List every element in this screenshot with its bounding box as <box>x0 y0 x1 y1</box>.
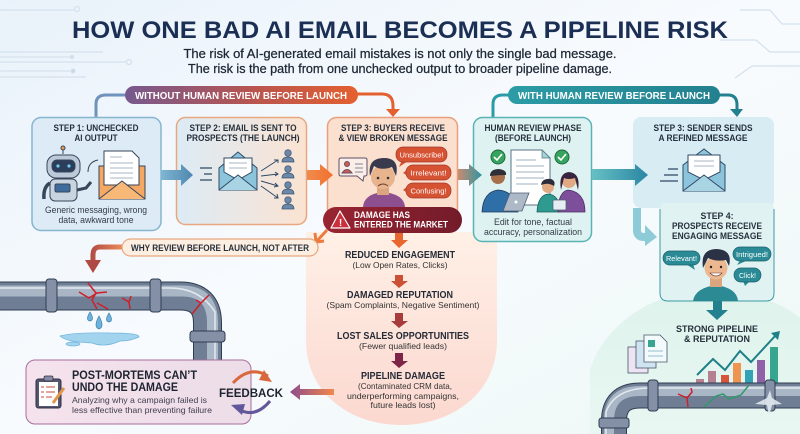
sender heading <box>654 123 752 143</box>
panel: post-mortems <box>26 360 251 424</box>
lost sales opportunities: (Fewer qualified leads) <box>359 341 447 351</box>
human review heading <box>484 123 582 143</box>
pipe flanges <box>46 279 225 342</box>
connector: step 1 to without banner <box>96 95 130 118</box>
post-mortems description: Analyzing why a campaign failed is <box>72 395 207 405</box>
banner: without human review <box>125 86 358 104</box>
banner: without human review: WITHOUT HUMAN REVIEW BEFORE LAUNCH <box>135 90 347 102</box>
icon: profile card bubble <box>339 158 367 181</box>
speech bubble: irrelevant: Irrelevant! <box>410 168 446 178</box>
human review description: accuracy, personalization <box>484 227 582 237</box>
icon: worried buyer <box>363 158 405 207</box>
speech bubble: relevant: Relevant! <box>666 254 697 263</box>
feedback loop: FEEDBACK <box>219 386 283 400</box>
reduced engagement: (Low Open Rates, Clicks) <box>352 260 448 270</box>
why review pill <box>122 239 318 256</box>
step 4 heading: STEP 4: <box>700 211 734 221</box>
step 1 heading: AI OUTPUT <box>74 133 118 143</box>
pipeline damage: future leads lost) <box>370 400 436 410</box>
connector: human review to with banner <box>493 95 515 118</box>
reduced engagement: REDUCED ENGAGEMENT <box>345 250 455 261</box>
consequence arrow 2 <box>391 275 408 288</box>
repaired crack <box>678 388 692 407</box>
step 3 heading: & VIEW BROKEN MESSAGE <box>338 133 448 143</box>
pipeline damage: underperforming campaigns, <box>347 391 459 401</box>
green seam <box>704 385 749 407</box>
water drops <box>88 312 112 329</box>
damage banner: ENTERED THE MARKET <box>354 220 448 230</box>
damage banner <box>323 207 462 233</box>
icon: envelope with document <box>88 151 145 199</box>
title: HOW ONE BAD AI EMAIL BECOMES A PIPELINE RISK <box>72 17 728 44</box>
arrow: human review to sender <box>592 164 648 186</box>
speech bubble: click: Click! <box>739 271 756 280</box>
lost sales opportunities <box>337 331 469 351</box>
icon: robot <box>44 146 91 201</box>
reduced engagement <box>345 250 455 270</box>
speech bubble: confusing: Confusing! <box>410 186 446 196</box>
consequence chain <box>326 233 480 410</box>
strong pipe illustration <box>599 380 800 434</box>
lost sales opportunities: LOST SALES OPPORTUNITIES <box>337 331 469 342</box>
damage banner: DAMAGE HAS <box>354 210 410 221</box>
arrow: damage to why pill <box>315 230 327 242</box>
sender heading: A REFINED MESSAGE <box>658 133 748 143</box>
panel: step 2 <box>176 118 306 224</box>
damaged reputation: DAMAGED REPUTATION <box>347 290 453 301</box>
human review description <box>484 217 582 237</box>
pipeline damage: PIPELINE DAMAGE <box>361 371 445 382</box>
consequence arrow 3 <box>391 313 408 328</box>
step 3 heading <box>338 123 448 143</box>
arrow: step 1 to step 2 <box>161 164 193 186</box>
icon: documents <box>628 335 667 373</box>
icon: prospects <box>282 150 294 209</box>
step 1 description: Generic messaging, wrong <box>45 205 147 215</box>
pipeline damage: (Contaminated CRM data, <box>358 381 452 391</box>
damaged reputation <box>326 290 480 310</box>
panel: step 3 sender <box>633 117 774 208</box>
subtitle: The risk is the path from one unchecked output to broader pipeline damage. <box>188 62 612 76</box>
arrow: why pill to pipe <box>85 247 124 273</box>
pipe flanges <box>599 380 775 428</box>
step 4 heading <box>672 211 762 241</box>
banner: with human review: WITH HUMAN REVIEW BEFORE LAUNCH <box>518 90 710 102</box>
strong pipeline heading: STRONG PIPELINE <box>676 324 758 335</box>
step 1 description: data, awkward tone <box>58 215 134 225</box>
subtitle: The risk of AI-generated email mistakes is not only the single bad message. <box>184 47 616 61</box>
speech bubble: unsubscribe: Unsubscribe! <box>400 150 444 160</box>
pipeline damage <box>347 371 459 410</box>
why review pill: WHY REVIEW BEFORE LAUNCH, NOT AFTER <box>131 243 309 254</box>
consequence arrow 4 <box>391 353 408 368</box>
sparkle <box>755 390 782 417</box>
step 1 heading <box>54 123 139 143</box>
post-mortems heading <box>72 370 197 394</box>
connector arrow: with banner to step 3 <box>716 95 743 117</box>
human review heading: HUMAN REVIEW PHASE <box>484 123 582 133</box>
icon: review document with checks <box>491 150 569 205</box>
strong pipeline heading <box>676 324 758 345</box>
strong pipeline heading: & REPUTATION <box>684 334 750 345</box>
icon: sent envelope <box>200 152 278 198</box>
step 4 heading: PROSPECTS RECEIVE <box>672 221 762 231</box>
arrow: step 4 to strong pipeline <box>706 301 728 320</box>
feedback loop <box>219 370 283 415</box>
arrow: step 3 to human review <box>458 164 482 186</box>
trend arrow <box>697 331 780 375</box>
panel: step 1 <box>32 118 161 230</box>
panel: step 4 <box>660 203 774 301</box>
connector arrow: without banner to step 3 <box>355 94 400 117</box>
step 1 heading: STEP 1: UNCHECKED <box>54 123 139 133</box>
subtitle <box>184 47 616 76</box>
step 2 heading: STEP 2: EMAIL IS SENT TO <box>190 123 296 133</box>
step 2 heading: PROSPECTS (THE LAUNCH) <box>186 133 300 143</box>
post-mortems description: less effective than preventing failure <box>72 405 212 415</box>
arrow: step 3 sender to step 4 <box>637 208 657 246</box>
icon: warning triangle: ! <box>339 218 342 229</box>
icon: clipboard <box>36 376 64 408</box>
speech bubble: intrigued: Intrigued! <box>736 250 768 259</box>
icon: review team <box>482 169 585 212</box>
arrow: pipeline damage to feedback <box>290 384 334 400</box>
arrow: step 2 to step 3 <box>307 164 333 186</box>
icon: refined envelope <box>660 149 725 191</box>
icon: happy prospect <box>693 249 738 301</box>
human review heading: (BEFORE LAUNCH) <box>495 133 571 143</box>
green hill <box>590 291 800 434</box>
leaking pipe illustration <box>0 279 225 362</box>
panel: human review phase <box>474 118 592 242</box>
post-mortems heading: POST-MORTEMS CAN’T <box>72 370 197 382</box>
water puddle <box>60 333 139 346</box>
step 1 description <box>45 205 147 225</box>
consequence arrow 1 <box>391 233 408 248</box>
sender heading: STEP 3: SENDER SENDS <box>654 123 752 133</box>
banner: with human review <box>508 86 720 104</box>
damaged reputation: (Spam Complaints, Negative Sentiment) <box>326 300 480 310</box>
step 4 heading: ENGAGING MESSAGE <box>672 231 762 241</box>
bar chart <box>696 331 780 385</box>
step 2 heading <box>186 123 300 143</box>
step 3 heading: STEP 3: BUYERS RECEIVE <box>341 123 445 133</box>
human review description: Edit for tone, factual <box>494 217 572 227</box>
post-mortems description <box>72 395 212 415</box>
post-mortems heading: UNDO THE DAMAGE <box>72 382 178 394</box>
panel: step 3 buyers <box>328 118 458 218</box>
funnel panel: consequences <box>306 232 497 425</box>
cracks <box>79 283 209 314</box>
